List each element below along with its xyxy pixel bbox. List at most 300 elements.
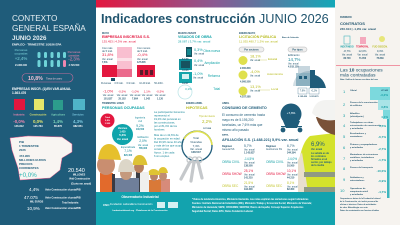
- item: estatal: Estatal: [268, 57, 278, 61]
- table: empresas by size: 1,1%: [144, 90, 151, 94]
- list: ocupaciones: montadores: [350, 135, 363, 138]
- panel: consumo de cemento: mayo es de 5.195,200: [222, 118, 254, 122]
- panel: consumo de cemento: toneladas, un 7,6% más que: [222, 123, 263, 127]
- panel: consumo de cemento: CONSUMO DE CEMENTO: [222, 106, 267, 110]
- icon: fijos discontinuos: [379, 36, 385, 42]
- item: estatal: Var. anual: [250, 59, 261, 62]
- panel: PIB map of Spain: 2026: [19, 148, 26, 152]
- panel: empresas inscritas: 7,6%: [102, 61, 108, 64]
- list: ocupaciones: Montadores de estructuras: [350, 153, 379, 156]
- icon: services: [73, 99, 85, 110]
- item: autonomica: [238, 70, 283, 84]
- table: afiliación right: -14,0%: [287, 157, 297, 161]
- text: ocupadas description: 6 sin empleo: [154, 154, 170, 158]
- panel: visados de obra: -1,0%: [193, 72, 204, 76]
- sector figures: Industria: [14, 112, 25, 116]
- panel: personas ocupadas: 2,0%: [139, 139, 147, 143]
- indicators list: 10,9%: [27, 206, 40, 211]
- table: afiliación right: [266, 144, 298, 191]
- worker 2: [113, 159, 139, 192]
- bar chart: empresas: [102, 47, 155, 81]
- icon: buildings by type: [293, 66, 310, 86]
- item: autonomica: Autonómica: [267, 72, 283, 76]
- right panel: contratos: 12,0%: [359, 49, 367, 53]
- panel: visados de obra: 0,3%: [194, 48, 203, 52]
- footer notes: * Datos de tendencia Anuncios, Ministerio Hacienda. Las notas explican las variaciones según Indicadores: [192, 198, 309, 201]
- sector figures: [13, 112, 84, 128]
- list: ocupaciones: -2,7%: [378, 147, 386, 151]
- panel: visados de obra: Reforma: [208, 74, 220, 78]
- table: afiliación right: OBRA CIVIL: [266, 160, 284, 164]
- footnote: contratos: de obra. Metodología: ver nota: [340, 206, 368, 209]
- icon: agriculture: [53, 100, 63, 110]
- table: empresas by size: 25.102: [118, 98, 126, 100]
- panel: empresas inscritas: 135.453 | 4,3% var. anual: [102, 40, 136, 44]
- callout: 6,9% mujeres: sector, por debajo: [311, 161, 332, 164]
- panel: empresas inscritas: EMPRESAS INSCRITAS S.S.: [102, 35, 150, 39]
- callout: unemployment rate: [22, 74, 73, 82]
- chart: hipotecas donut: 128.547: [191, 150, 201, 154]
- panel: visados de obra: 4.105: [182, 68, 189, 72]
- icon: reform circle: [178, 85, 192, 99]
- panel: visados de obra: 28.087 | 3,7% var. anual: [178, 40, 211, 44]
- right panel: contratos: INDEFINIDO: [340, 46, 354, 48]
- panel: personas ocupadas: 9,2%: [136, 124, 144, 128]
- worker 4: [145, 169, 161, 192]
- text: ocupadas description: [154, 110, 185, 158]
- chart: hipotecas donut: [182, 131, 212, 161]
- table: empresas by size: 6-9 trab.: [127, 82, 136, 85]
- table: empresas by size: -1,0%: [131, 90, 139, 94]
- panel: empresas inscritas: Var. anual: [102, 58, 113, 61]
- footer notes: Seguridad Social; Datos EPA; Datos Fundación Laboral.: [192, 210, 254, 213]
- table: afiliación left: -14,5%: [244, 157, 254, 161]
- table: afiliación right: 82.300: [287, 188, 295, 191]
- employment block: [12, 42, 81, 67]
- indicators list: Total Industria: [62, 202, 79, 204]
- item: local: [238, 85, 279, 98]
- table: afiliación left: OBRA SEC: [222, 184, 239, 188]
- panel: PIB map of Spain: 473.906: [19, 154, 30, 158]
- chart: hipotecas donut: Viviendas: [190, 140, 202, 144]
- table: empresas by size: -1,0%: [103, 88, 114, 94]
- table: empresas by size: Var. anual: [103, 94, 114, 97]
- panel: personas ocupadas: PERSONAS OCUPADAS: [102, 106, 145, 110]
- panel: personas ocupadas: 785,900: [139, 148, 148, 150]
- stat: hipotecas percentage: 127.098: [203, 128, 212, 130]
- table: afiliación left: 21,5%: [244, 181, 253, 185]
- panel: PIB map of Spain: +0,0%: [19, 172, 37, 179]
- panel: PIB map of Spain: CORRIENTES: [19, 166, 39, 170]
- panel: hipotecas: HIPOTECAS: [186, 106, 208, 110]
- text: ocupadas description: hombres: [154, 128, 165, 132]
- panel: personas ocupadas: TRIMESTRE 1/2026: [102, 102, 124, 105]
- title: contexto general: CONTEXTO: [12, 14, 57, 23]
- panel: consumo de cemento: [222, 102, 302, 132]
- list: ocupaciones: 9: [343, 177, 346, 182]
- icon: people row: [38, 52, 66, 67]
- panel: empresas inscritas: Con más: [102, 46, 113, 50]
- employment block: -2,3%: [68, 56, 80, 62]
- text: ocupadas description: representó el: [154, 114, 170, 118]
- right panel: contratos: CONTRATOS: [340, 21, 365, 26]
- indicators list: Valor Construcción s/cuota/PIB: [45, 188, 81, 192]
- panel: PIB map of Spain: PRECIOS: [19, 162, 33, 166]
- worker 3: [132, 155, 149, 192]
- list: ocupaciones: y asimilados: [350, 194, 364, 196]
- table: empresas by size: 0-5 trab.: [115, 82, 124, 85]
- table: afiliación left: 25,1%: [244, 169, 253, 173]
- list: ocupaciones: 8: [343, 166, 346, 171]
- heading: 10 ocupaciones: Nota: Gráfico de barras con datos del mes: [340, 78, 378, 81]
- footnote: contratos: Ocupaciones: datos de la Fundación Laboral: [340, 197, 381, 200]
- sector figures: 982.651: [73, 124, 83, 128]
- employment block: EMPLEO · TRIMESTRE 1/2026 EPA: [12, 42, 62, 46]
- small stats licitacion: [298, 88, 319, 98]
- list: ocupaciones: [340, 87, 390, 198]
- sector figures: 146.812: [14, 124, 24, 128]
- indicators list: MILLONES: [73, 174, 86, 176]
- list: ocupaciones: Peones del transporte: [350, 166, 374, 169]
- panel: hipotecas: [181, 102, 216, 181]
- badge: ocupadas total: Total: [105, 116, 110, 119]
- badge: obra civil: 1.420: [120, 130, 126, 134]
- indicators list: 20.540: [68, 168, 85, 174]
- footer logos: Observatorio Industrial: [121, 195, 159, 199]
- panel: empresas inscritas: 31,8%: [102, 52, 114, 57]
- badge: por tipo: Por tipos: [292, 48, 303, 52]
- companies block: [12, 87, 85, 110]
- list: ocupaciones: -0,9%: [378, 179, 386, 183]
- title: contexto general: JUNIO 2026: [12, 35, 47, 42]
- badge: obra civil: Var. anual: [117, 138, 128, 141]
- panel: visados de obra: Var. anual: [193, 76, 204, 80]
- panel: visados de obra: Obra nueva: [203, 49, 220, 53]
- sector figures: Agricultura: [51, 112, 65, 116]
- item: estatal: 18,1%: [250, 54, 261, 58]
- employment block: ocupadas: [14, 52, 28, 56]
- footer band: [96, 192, 335, 225]
- table: afiliación right: 8,1%: [287, 181, 294, 185]
- table: afiliación left: Var. anual: [244, 174, 255, 176]
- panel: personas ocupadas: Ingeniería: [135, 116, 146, 120]
- footnote: contratos: de la Construcción, sin incluir personal de: [340, 200, 378, 203]
- top gradient bar: [96, 0, 335, 8]
- indicators list: 47.075: [24, 195, 38, 200]
- employment block: +2,4%: [15, 56, 27, 61]
- table: afiliación right: Régimen: [266, 145, 277, 148]
- sector figures: 0,0%: [33, 119, 43, 124]
- indicators list: (Cuota var. anual): [71, 182, 91, 186]
- footer notes: Fuentes: Instituto Nacional de Estadística (INE), Ministerio Trabajo y Economía Social; Ministerio de Vivienda;: [192, 202, 312, 205]
- panel: personas ocupadas: 7,1%: [124, 149, 132, 153]
- panel: consumo de cemento: ABRIL: [222, 102, 230, 105]
- icon: cement mixer: +7,6%: [287, 111, 296, 115]
- list: ocupaciones: Peones de la construcción: [350, 101, 378, 104]
- panel: visados de obra: VISADOS DE OBRA: [178, 35, 212, 39]
- panel: empresas inscritas: [101, 32, 166, 100]
- sector figures: 85.876: [54, 124, 63, 128]
- panel: consumo de cemento: El consumo de cemento hasta: [222, 113, 265, 117]
- panel: licitación pública: 11.035.480,7 1,3% var. anual: [239, 40, 278, 44]
- list: ocupaciones: 4: [343, 123, 346, 128]
- icon: workers photo: [97, 144, 170, 192]
- text: ocupadas description: Más de un 42,6% de: [154, 133, 179, 137]
- small stats licitacion: 7,9%: [300, 90, 306, 92]
- text: ocupadas description: Aprox. 1 de cada: [154, 150, 175, 154]
- panel: hipotecas: ENERO-ABRIL: [186, 102, 203, 105]
- chart: hipotecas donut: 7,3%: [193, 144, 200, 148]
- indicators list: MIL EUROS: [30, 200, 44, 204]
- table: afiliación left: Var. anual: [244, 186, 255, 188]
- footnote: contratos: [340, 197, 381, 212]
- panel: personas ocupadas: Especializada: [121, 147, 136, 149]
- item: obra civil: 14,7%: [288, 57, 301, 62]
- panel: visados de obra: Var. anual: [194, 52, 205, 56]
- panel: afiliación: [222, 134, 298, 191]
- list: ocupaciones: 3,5%: [379, 124, 386, 128]
- badge: ocupadas total: 1.500: [105, 123, 111, 125]
- footer logos: Fundación Laboral: [110, 202, 132, 206]
- panel: visados de obra: 0,4%: [194, 59, 203, 63]
- small stats licitacion: 5.015.870: [310, 96, 319, 98]
- title: contexto general: [12, 14, 86, 42]
- icon: houses: [179, 72, 192, 83]
- table: afiliación left: 194.300: [244, 188, 253, 191]
- heading: 10 ocupaciones: más contratadas: [340, 72, 376, 78]
- footer logos: fundacionlaboral.org · Plataforma de la Construcción: [112, 209, 168, 212]
- list: ocupaciones: de edificios: [350, 105, 363, 107]
- callout: unemployment rate: Tasa de paro: [46, 76, 63, 80]
- table: empresas by size: 50-249 t.: [154, 82, 164, 85]
- panel: visados de obra: 6.120: [182, 57, 189, 61]
- panel: empresas inscritas: -0,4%: [137, 52, 148, 57]
- employment block: paradas: [69, 54, 80, 58]
- table: empresas by size: Var. anual: [117, 94, 128, 97]
- footer notes: Ministerio de Hacienda; SEPE; OFICEMEN; SEOPAN; Banco de España; Consejo Superior Arquitectos: [192, 206, 304, 209]
- callout: 6,9% mujeres: de la media: [311, 164, 325, 167]
- list: ocupaciones: 7: [343, 156, 346, 161]
- table: afiliación right: 6,7%: [287, 144, 295, 148]
- panel: visados de obra: 3.247: [182, 81, 189, 85]
- indicators list: Valor Construcción s/cuota/PIB: [45, 207, 81, 210]
- list: ocupaciones: estructurales de construcción: [350, 124, 382, 127]
- panel: licitación pública: ENERO-MAYO: [239, 32, 255, 35]
- stat: hipotecas percentage: 2,2%: [202, 119, 212, 124]
- table: afiliación left: 5,7%: [244, 144, 252, 148]
- icon: indefinidos: [344, 36, 350, 44]
- item: obra civil: Edificación: [288, 54, 300, 57]
- table: afiliación right: Autónomos SS: [266, 148, 282, 151]
- list: ocupaciones: 10: [340, 188, 345, 193]
- right panel: contratos: TEMPORAL: [356, 46, 370, 48]
- panel: PIB map of Spain: [10, 136, 72, 180]
- panel: visados de obra: Var. anual: [194, 64, 205, 67]
- panel: PIB map of Spain: PIB: [19, 140, 25, 144]
- item: autonomica: -4,0%: [250, 70, 261, 74]
- indicators list: Vitál Construcción: [69, 178, 91, 180]
- table: empresas by size: Var. anual: [142, 94, 153, 97]
- panel: empresas inscritas: Var. anual: [137, 58, 148, 61]
- table: afiliación left: [222, 144, 255, 191]
- callout: 6,9% mujeres: Var. anual: [311, 148, 322, 151]
- table: afiliación right: Var. anual: [287, 174, 298, 176]
- panel: personas ocupadas: Edificación: [137, 137, 149, 139]
- item: local: 4.107.580: [240, 96, 251, 98]
- panel: PIB map of Spain: MILLONES EUROS: [19, 158, 46, 162]
- companies block: EMPRESAS INSCR. (1)/EN VAR.ANUAL: [12, 87, 71, 91]
- text: ocupadas description: por el 81,0% de los: [154, 124, 178, 128]
- text: ocupadas description: y más de los que ocupa: [154, 144, 183, 148]
- list: ocupaciones: y asimilados: [350, 147, 364, 149]
- right panel: contratos: FIJO DISCON.: [372, 46, 388, 48]
- list: ocupaciones: 3: [343, 113, 346, 118]
- list: ocupaciones: oxicortadores: [350, 179, 365, 182]
- item: estatal: [238, 54, 278, 70]
- sector figures: 4,3%: [73, 119, 83, 124]
- list: ocupaciones: -4,7%: [378, 190, 386, 194]
- sector figures: -0,0%: [13, 119, 25, 124]
- list: ocupaciones: 47.342: [381, 89, 389, 92]
- list: ocupaciones: Pintores y empapeladores: [350, 143, 378, 146]
- footer notes: [192, 198, 312, 213]
- panel: visados de obra: MARZO 2026/25: [178, 32, 197, 35]
- icon: construction: [34, 99, 44, 110]
- small stats licitacion: -0,2%: [311, 90, 318, 92]
- icon: industry: [14, 99, 25, 110]
- item: obra civil: 4.015.150: [288, 66, 299, 68]
- right panel: contratos: [335, 0, 400, 225]
- chart: hipotecas donut: Var. anual: [190, 147, 202, 151]
- stat: hipotecas percentage: Tipo de interés: [199, 115, 216, 118]
- badge: ocupadas total: 5,5%: [105, 120, 110, 122]
- icon: large building: [179, 59, 192, 70]
- table: empresas by size: -0,5%: [118, 90, 126, 94]
- employment block: Personas: [68, 50, 81, 54]
- heading: 10 ocupaciones: Las 10 ocupaciones: [340, 68, 383, 74]
- table: empresas by size: Var. anual: [155, 94, 166, 97]
- text: ocupadas description: Del 36,9% tiene 40 años: [154, 140, 184, 144]
- panel: empresas inscritas: de 5 trab.: [102, 49, 113, 53]
- table: empresas by size: 7.804: [132, 98, 139, 100]
- table: afiliación left: 1.143.827: [244, 152, 255, 154]
- panel: personas ocupadas: 820,400: [124, 154, 133, 157]
- worker 1: [97, 144, 121, 192]
- icon: woman worker: [298, 100, 335, 192]
- list: ocupaciones: 2: [343, 102, 346, 107]
- table: afiliación right: OBRA SHOW: [266, 172, 286, 176]
- table: afiliación left: OBRA CIVIL: [222, 160, 240, 164]
- chart: hipotecas donut: Total: [193, 136, 199, 140]
- list: ocupaciones: -6,7%: [378, 135, 386, 139]
- icon: temporales: [360, 37, 366, 44]
- panel: personas ocupadas: Var. anual: [138, 144, 149, 147]
- list: ocupaciones: Operadores de: [350, 188, 366, 190]
- table: empresas by size: 1.542: [144, 98, 151, 100]
- badge: ocupadas total: [100, 114, 114, 128]
- table: empresas by size: 101.827: [104, 98, 113, 100]
- footer logos: [103, 195, 178, 212]
- badge: ratio: Por sectores: [244, 48, 259, 52]
- table: empresas by size: -0,5%: [156, 90, 164, 94]
- list: ocupaciones: -10,0%: [376, 169, 386, 173]
- panel: personas ocupadas: [100, 102, 149, 157]
- item: estatal: 2.000.800: [240, 67, 251, 70]
- panel: empresas inscritas: 127.845: [137, 61, 146, 64]
- table: afiliación left: General SS: [222, 148, 235, 151]
- footnote: contratos: oficina ni técnicos. Datos de actividades: [340, 203, 376, 206]
- footer logos: de la Construcción: [131, 202, 153, 206]
- title: contexto general: GENERAL ESPAÑA: [12, 23, 86, 33]
- table: afiliación left: 141.210: [244, 176, 253, 180]
- list: ocupaciones: Oficial: [350, 90, 357, 92]
- panel: visados de obra: 3,1%: [185, 87, 192, 91]
- worker 5: [158, 167, 170, 192]
- panel: licitación pública: LICITACIÓN PÚBLICA: [239, 34, 277, 39]
- right panel: contratos: Var. anual: [342, 54, 353, 56]
- table: afiliación right: 10.500: [287, 164, 295, 168]
- panel: afiliación: ABRIL: [222, 134, 229, 136]
- list: ocupaciones: 1: [343, 89, 346, 94]
- table: afiliación right: Var. anual: [287, 186, 298, 188]
- right panel: contratos: 71.053: [359, 58, 367, 60]
- sector figures: Servicios: [72, 112, 84, 116]
- list: ocupaciones: 4,1%: [381, 115, 388, 119]
- table: afiliación right: Var. anual: [287, 162, 298, 164]
- table: afiliación left: Var. anual: [244, 148, 255, 152]
- item: obra civil: Var. anual: [288, 62, 299, 66]
- sector figures: 1,4%: [53, 119, 63, 124]
- item: local: Var. anual: [250, 90, 261, 92]
- table: afiliación right: 344.394: [287, 152, 296, 154]
- badge: obra civil: 5,3%: [119, 133, 126, 137]
- heading: 10 ocupaciones: [340, 68, 383, 81]
- table: afiliación left: 138.500: [244, 164, 253, 168]
- right panel: contratos: -8,7%: [343, 49, 351, 53]
- right panel: contratos: FEBRERO: [340, 16, 352, 19]
- panel: licitación pública: Base de licitación: [282, 36, 300, 39]
- right panel: contratos: 0,3%: [377, 49, 384, 53]
- list: ocupaciones: 6: [343, 145, 346, 150]
- list: ocupaciones: metálicas, instaladores: [350, 156, 375, 159]
- right panel: contratos: Var. anual: [375, 54, 386, 56]
- list: ocupaciones: maquinaria móvil: [350, 191, 368, 193]
- text: ocupadas description: 19,0% del personal en: [154, 117, 181, 121]
- panel: empresas inscritas: de 5 trab.: [137, 49, 148, 53]
- table: afiliación left: Régimen: [222, 145, 233, 148]
- right panel: contratos: 75.839: [376, 58, 384, 60]
- panel: visados de obra: [178, 32, 220, 99]
- table: afiliación right: 10,1%: [287, 169, 296, 173]
- list: ocupaciones: y asimilados: [350, 128, 364, 130]
- footnote: contratos: Datos de contratación con fuentes oficiales: [340, 209, 379, 212]
- list: ocupaciones: Albañiles: [350, 112, 361, 115]
- panel: consumo de cemento: mismo año pasado: [222, 128, 249, 132]
- table: afiliación left: Var. anual: [244, 162, 255, 164]
- table: afiliación left: OBRA SHOW: [222, 172, 242, 176]
- table: afiliación right: Var. anual: [287, 148, 298, 152]
- list: ocupaciones: -1,7%: [378, 158, 386, 162]
- text: ocupadas description: las constructoras,: [154, 120, 175, 124]
- employment block: Personas: [15, 48, 28, 52]
- text: ocupadas description: construcción: [154, 147, 170, 151]
- icon: building rest: [310, 70, 326, 88]
- callout: 6,9% mujeres: La subida es de: [311, 152, 330, 155]
- panel: personas ocupadas: 140,500: [136, 128, 145, 131]
- list: ocupaciones: Encofradores y: [350, 133, 367, 135]
- right panel: contratos: 240.314 | -1,9% var. anual: [340, 27, 376, 31]
- badge: obra civil: Varones: [118, 127, 128, 130]
